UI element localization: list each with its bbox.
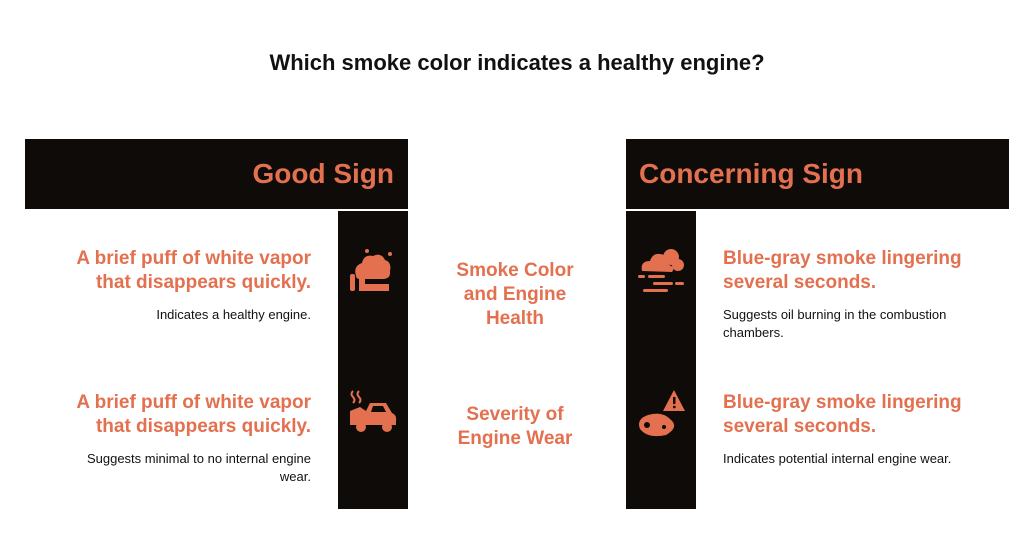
text: good 2 <box>76 392 311 484</box>
panel: concerning sign header <box>626 139 1009 209</box>
text: concern 1: Blue-gray smoke lingering several seconds. <box>723 248 962 293</box>
icon: car with smoke <box>350 390 396 432</box>
title: Which smoke color indicates a healthy engine? <box>269 50 765 75</box>
panel: good sign header <box>25 139 408 209</box>
icon: smoke puff hand <box>350 249 392 291</box>
text: good 1: A brief puff of white vapor that disappears quickly. <box>76 248 311 293</box>
text: concern 2 <box>723 392 962 466</box>
text: concern 1: Suggests oil burning in the combustion chambers. <box>723 307 946 340</box>
panel: concerning column <box>626 211 696 509</box>
text: concern 2: Indicates potential internal engine wear. <box>723 451 951 466</box>
icon: cloud fog <box>638 249 684 292</box>
text: center 2: Severity of Engine Wear <box>458 404 572 449</box>
panel: concerning sign header: Concerning Sign <box>639 158 863 189</box>
text: concern 1 <box>723 248 962 340</box>
text: center 1: Smoke Color and Engine Health <box>456 260 574 329</box>
text: good 2: A brief puff of white vapor that disappears quickly. <box>76 392 311 437</box>
panel: good sign header: Good Sign <box>252 158 394 189</box>
text: concern 2: Blue-gray smoke lingering several seconds. <box>723 392 962 437</box>
text: good 2: Suggests minimal to no internal engine <box>87 451 311 466</box>
panel: good sign column <box>338 211 408 509</box>
text: good 2: wear. <box>280 469 311 484</box>
text: good 1: Indicates a healthy engine. <box>156 307 311 322</box>
icon: warning with oil <box>639 390 685 436</box>
text: good 1 <box>76 248 311 322</box>
